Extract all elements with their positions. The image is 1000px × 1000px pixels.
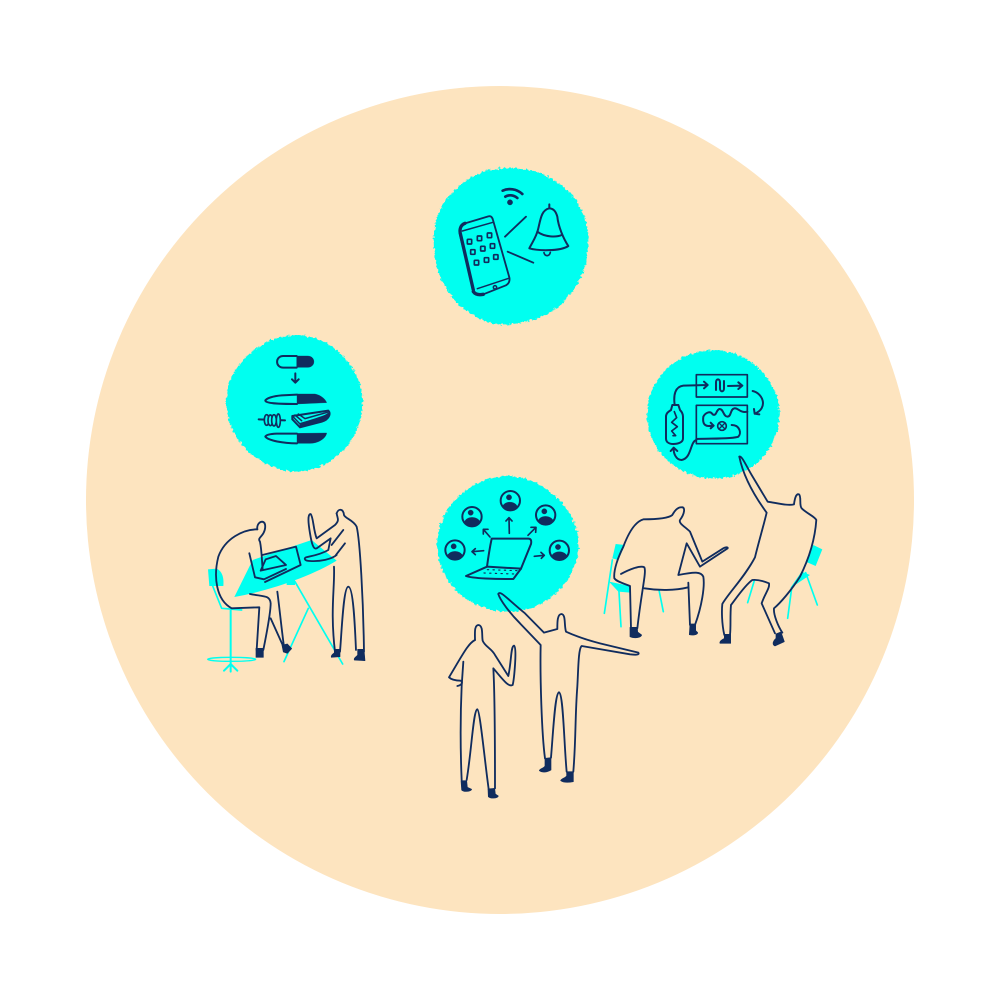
dancing figure: [720, 457, 816, 646]
icon: smartphone: [460, 216, 510, 295]
connector: tank to top box: [674, 382, 708, 405]
panel: notifications icon bubble: [434, 168, 588, 324]
arrows from laptop: [472, 518, 544, 558]
standing figure: [305, 510, 365, 661]
left chair, cyan: [604, 544, 663, 627]
avatar right: [550, 541, 569, 560]
icon: halved capsule top: [265, 394, 327, 404]
icon: capsule parts: [259, 411, 330, 427]
arrow down: [292, 373, 299, 383]
right chair, cyan: [748, 545, 822, 618]
cyan blob: capsule: [226, 335, 363, 472]
left standing figure: [449, 625, 515, 798]
right scene: two figures with chairs: [604, 457, 822, 646]
icon: top box: [696, 375, 747, 397]
panel: laptop network bubble: [437, 476, 579, 612]
cyan blob: notifications: [434, 168, 588, 324]
cyan blob: network: [437, 476, 579, 612]
avatars: [445, 491, 569, 560]
avatar left: [445, 540, 465, 560]
seated figure: [216, 522, 301, 657]
icon: laptop: [466, 539, 531, 579]
icon: tank with resistor: [666, 405, 683, 444]
seated figure, back view: [614, 507, 728, 638]
avatar upper right: [536, 505, 555, 525]
connector: return to tank: [671, 440, 696, 460]
bottom scene: two standing figures: [449, 593, 639, 798]
avatar upper left: [462, 507, 482, 526]
avatar top: [501, 491, 520, 510]
chair, cyan: [208, 569, 256, 672]
right standing figure, arms spread: [498, 593, 639, 782]
connector: box loop arrow: [753, 391, 763, 414]
icon: bottom box with coil and valve: [696, 405, 747, 444]
icon: halved capsule bottom: [265, 433, 327, 443]
icon: capsule: [277, 356, 314, 368]
peach background circle: [86, 86, 914, 914]
panel: circuit diagram bubble: [647, 350, 779, 478]
left scene: table and two figures: [208, 510, 365, 672]
icon: wifi: [503, 189, 522, 205]
cyan blob: circuit: [647, 350, 779, 478]
table, cyan: [234, 540, 343, 664]
icon: bell: [529, 204, 568, 256]
panel: capsule icon bubble: [226, 335, 363, 472]
connector lines phone to bell: [505, 217, 533, 263]
